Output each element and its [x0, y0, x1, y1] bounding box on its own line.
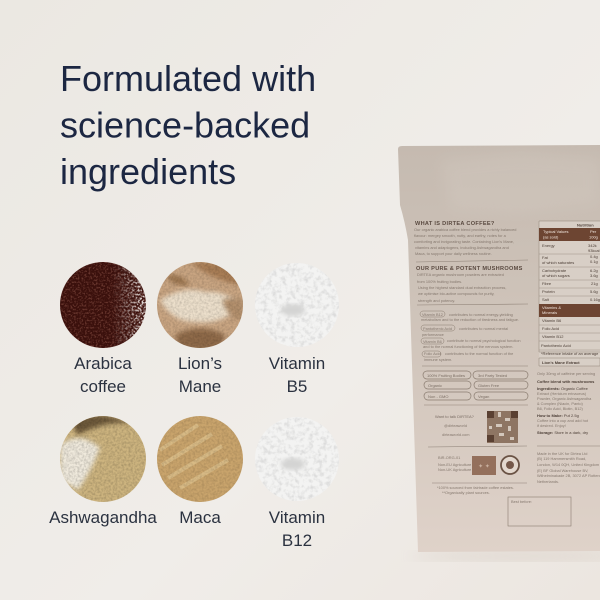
mushrooms section: from 100% fruiting bodies.	[417, 279, 462, 284]
nutrition table: 6.2g	[590, 268, 598, 273]
ingredient: Vitamin B5	[254, 262, 340, 396]
nutrition table: 0.1g	[590, 259, 598, 264]
nutrition table: 3.6g	[590, 273, 598, 278]
contact block: @dirteaworld	[444, 423, 467, 428]
ingredients text: London, W14 0QH, United Kingdom	[537, 462, 599, 467]
nutrition table: Energy	[542, 243, 555, 248]
nutrition table: Minerals	[542, 310, 557, 315]
ingredient: Arabica coffee: coffee	[80, 377, 126, 396]
organic badges	[438, 455, 519, 475]
floor shadow	[410, 551, 600, 561]
title: Formulated with	[60, 58, 316, 99]
vitamin claims: metabolism and to the reduction of tiredness and fatigue.	[421, 317, 519, 322]
ingredients text: Coffee into a cup and add hot	[537, 418, 589, 423]
ingredient: Vitamin B12: B12	[282, 531, 312, 550]
nutrition table: Typical Values	[543, 229, 568, 234]
coffee description: comforting and invigorating taste. Containing Lion's Mane,	[414, 239, 514, 244]
vitamin claims: contributes to the normal function of the	[445, 351, 513, 356]
ingredients text: if desired. Enjoy!	[537, 423, 566, 428]
ingredient: Ashwagandha: Ashwagandha	[49, 508, 157, 527]
mushrooms section: DIRTEA organic mushroom powders are extracted	[417, 272, 504, 277]
vitamin claims: Vitamin B6	[423, 339, 442, 344]
vitamin claims	[420, 311, 521, 362]
coffee description: vitamins and adaptogens, including Ashwagandha and	[415, 245, 509, 250]
ingredients text: (B) 119 Hammersmith Road,	[537, 456, 586, 461]
nutrition table: 5.6g	[590, 289, 598, 294]
vitamin claims: performance	[422, 332, 444, 337]
product pouch	[398, 145, 600, 552]
certification pills: Vegan	[478, 394, 489, 399]
ingredient: Vitamin B5: Vitamin	[269, 354, 325, 373]
pouch print	[414, 221, 600, 526]
nutrition table: 0.16g	[590, 297, 600, 302]
nutrition table: *Reference intake of an average	[541, 351, 599, 356]
nutrition table: of which saturates	[542, 260, 574, 265]
nutrition table: Per	[590, 229, 597, 234]
ingredient: Ashwagandha	[49, 415, 157, 527]
contact block: Want to talk DIRTEA?	[435, 414, 475, 419]
nutrition table: Folic Acid	[542, 326, 559, 331]
coffee description: flavour: mergey smooth, nutty, and earthy, notes for a	[414, 233, 507, 238]
nutrition table: Pantothenic Acid	[541, 343, 571, 348]
organic badges: BIR-ORG-01	[438, 455, 460, 460]
certification pills: Non - GMO	[428, 394, 448, 399]
certification pills: Gluten Free	[478, 383, 500, 388]
ingredient: Arabica coffee	[60, 262, 146, 396]
ingredient: Maca: Maca	[179, 508, 221, 527]
title	[60, 58, 316, 192]
coffee description: WHAT IS DIRTEA COFFEE?	[415, 221, 495, 227]
vitamin claims: immune system.	[424, 357, 452, 362]
certification pills: 3rd Party Tested	[478, 373, 507, 378]
ingredients text: Netherlands.	[537, 479, 559, 484]
organic badges: Non-EU Agriculture	[438, 462, 471, 467]
nutrition table: of which sugars	[542, 273, 570, 278]
ingredients text: & Complex (Niacin, Panto)	[537, 401, 584, 406]
nutrition table: Vitamin B6	[542, 318, 562, 323]
ingredients text: (E) BF Global Warehouse BV,	[537, 468, 588, 473]
ingredients text: How to Make: Put 2.5g	[537, 413, 579, 418]
title: science-backed	[60, 104, 310, 146]
nutrition table: Salt	[542, 297, 550, 302]
ingredients text: B6, Folic Acid, Biotin, B12)	[537, 406, 584, 411]
contact block	[435, 414, 475, 437]
ingredients text: Extract (Hericium erinaceus)	[537, 391, 587, 396]
pouch crease highlight	[440, 152, 600, 214]
ingredients text: Coffee blend with mushrooms	[537, 379, 595, 384]
coffee description	[414, 221, 516, 256]
ingredient: Vitamin B5: B5	[287, 377, 307, 396]
nutrition table: 21g	[591, 281, 598, 286]
mushrooms section	[416, 266, 523, 303]
nutrition table: (as sold)	[543, 234, 559, 240]
ingredients text: Ingredients: Organic Coffee	[537, 386, 589, 391]
footnotes: **Organically plant sources.	[442, 490, 490, 495]
nutrition table: 0.4g	[590, 254, 598, 259]
nutrition table: 100g	[589, 234, 598, 240]
vitamin claims: contributes to normal energy-yielding	[449, 312, 513, 317]
nutrition table: Vitamin B12	[542, 334, 564, 339]
ingredient: Lion's Mane	[157, 262, 243, 396]
nutrition table: Carbohydrate	[542, 268, 567, 273]
nutrition table: Fibre	[542, 281, 552, 286]
ingredients text: Made in the UK for Dirtea Ltd	[537, 451, 587, 456]
ingredients text: Storage: Store in a dark, dry	[537, 430, 588, 435]
certification pills: Organic	[428, 383, 442, 388]
contact block: dirteaworld.com	[442, 432, 469, 437]
mushrooms section: OUR PURE & POTENT MUSHROOMS	[416, 266, 523, 272]
nutrition table: Protein	[542, 289, 555, 294]
vitamin claims: and to the normal functioning of the nervous system.	[423, 344, 513, 349]
ingredient: Maca	[157, 416, 243, 527]
coffee description: Our organic arabica coffee blend provides a richly balanced	[414, 227, 516, 232]
ingredient: Arabica coffee: Arabica	[74, 354, 132, 373]
ingredients text: Only 30mg of caffeine per serving	[537, 371, 595, 376]
nutrition table: Nutrition	[577, 222, 594, 228]
QR code	[487, 411, 518, 443]
vitamin claims: Vitamin B12	[422, 312, 443, 317]
best before box: Best before:	[511, 499, 532, 504]
vitamin claims: Pantothenic Acid	[423, 326, 452, 331]
ingredients text	[537, 371, 600, 484]
title: ingredients	[60, 151, 236, 192]
ingredient: Lion's Mane: Mane	[179, 377, 221, 396]
organic badges: Non-UK Agriculture	[438, 467, 471, 472]
vitamin claims: contribute to normal psychological function	[447, 338, 521, 343]
footnotes: *100% sourced from fairtrade coffee estates.	[437, 485, 514, 490]
footnotes	[437, 485, 514, 495]
section divider lines	[416, 260, 600, 483]
best before box	[508, 497, 571, 526]
ingredient: Vitamin B12	[254, 416, 340, 550]
mushrooms section: strength and potency.	[418, 298, 455, 303]
certification pills	[423, 371, 528, 400]
vitamin claims: Folic Acid	[424, 351, 441, 356]
nutrition table: Vitamins &	[542, 305, 561, 310]
ingredients text: Powder, Organic Ashwagandha	[537, 396, 592, 401]
ingredient: Vitamin B12: Vitamin	[269, 508, 325, 527]
nutrition table: 93kcal	[588, 248, 600, 253]
organic badges: ✦ ✦	[478, 463, 490, 470]
nutrition table: Fat	[542, 255, 549, 260]
vitamin claims: contributes to normal mental	[459, 326, 508, 331]
nutrition table: 342k	[588, 243, 597, 248]
mushrooms section: we optimise bio-active compounds for purity,	[418, 291, 494, 296]
certification pills: 100% Fruiting Bodies	[427, 373, 465, 378]
mushrooms section: Using the highest standard dual extraction process,	[418, 285, 506, 290]
ingredient: Lion's Mane: Lion’s	[178, 354, 222, 373]
coffee description: Maca, to support your daily wellness routine.	[415, 251, 492, 256]
nutrition table	[539, 221, 600, 366]
nutrition table: Lion's Mane Extract	[542, 360, 580, 365]
